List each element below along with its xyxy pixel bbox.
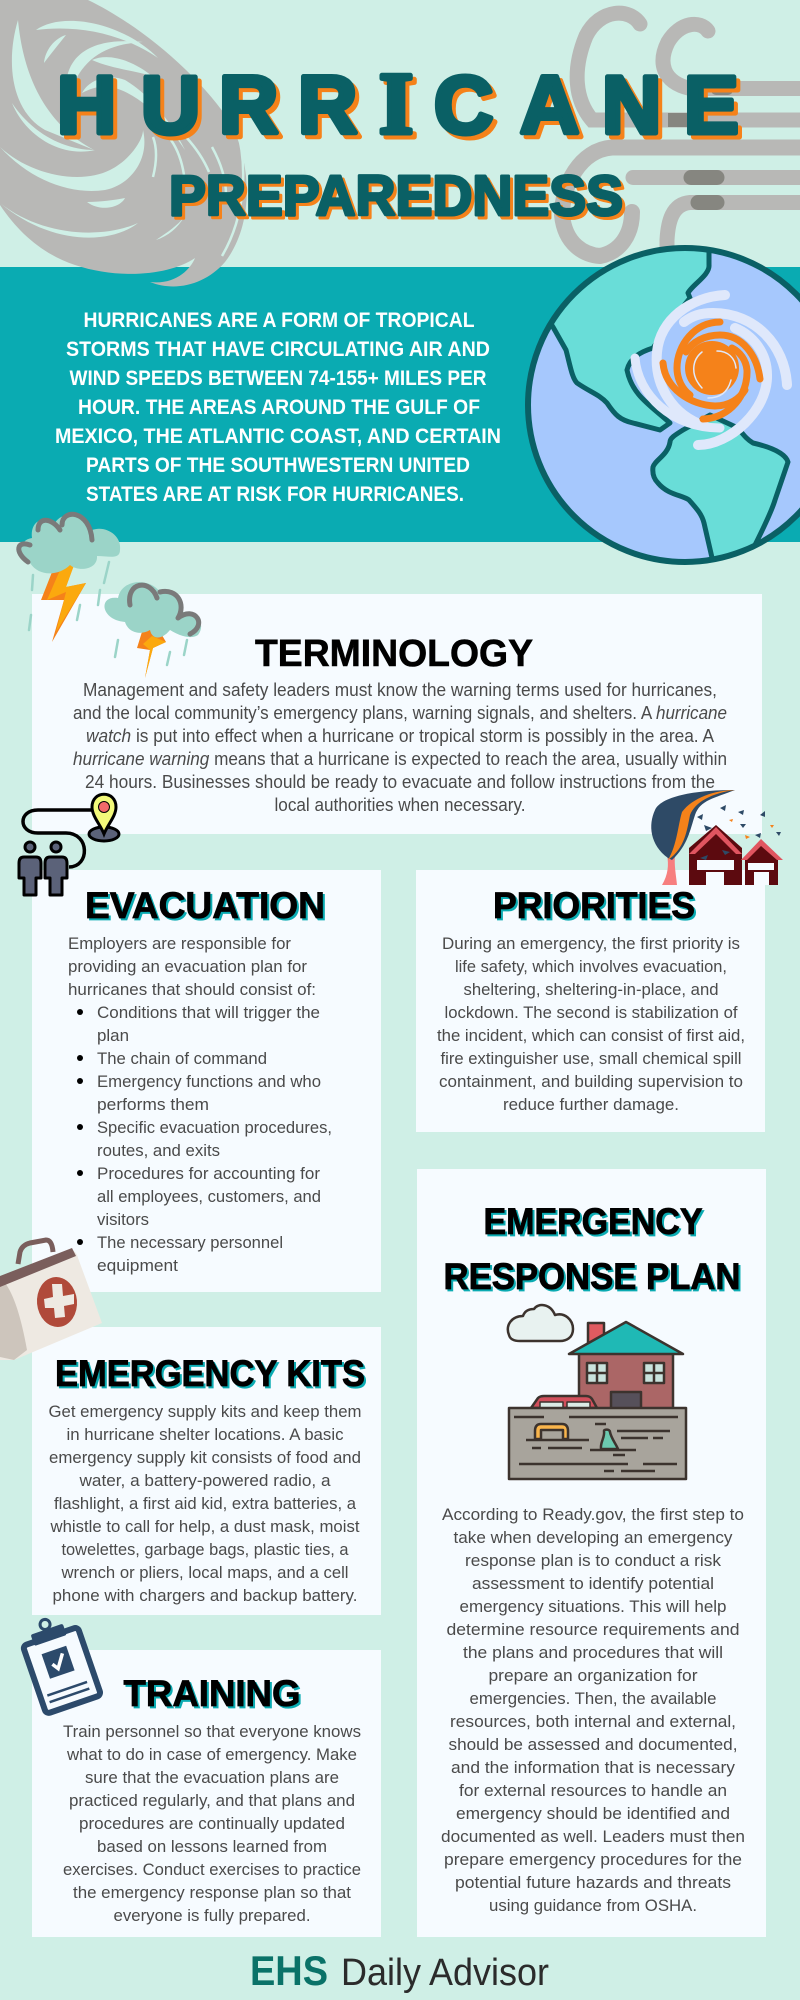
emergency kits text: phone with chargers and backup battery. (52, 1586, 358, 1605)
title: HURRICANE: R (298, 60, 357, 151)
evacuation bullet list: The necessary personnel (97, 1233, 283, 1252)
priorities text: life safety, which involves evacuation, (455, 957, 727, 976)
evacuation bullet list: The chain of command (97, 1049, 267, 1068)
intro text: STATES ARE AT RISK FOR HURRICANES. (86, 483, 464, 506)
emergency response plan text: documented as well. Leaders must then (441, 1827, 745, 1846)
heading: training: TRAINING (124, 1673, 300, 1714)
training text: sure that the evacuation plans are (85, 1768, 339, 1787)
priorities text: During an emergency, the first priority is (442, 934, 740, 953)
evacuation bullet list: Procedures for accounting for (97, 1164, 320, 1183)
icon: storm cloud right (104, 582, 201, 678)
panel: terminology (32, 594, 762, 834)
training text: based on lessons learned from (97, 1837, 327, 1856)
title: HURRICANE: R (219, 60, 278, 151)
priorities text: reduce further damage. (503, 1095, 679, 1114)
panel: emergency response plan (417, 1169, 766, 1937)
emergency kits text: water, a battery-powered radio, a (78, 1471, 331, 1490)
intro text: MEXICO, THE ATLANTIC COAST, AND CERTAIN (55, 425, 501, 448)
emergency kits text: whistle to call for help, a dust mask, moist (50, 1517, 360, 1536)
title: HURRICANE: E (684, 60, 739, 151)
priorities text: containment, and building supervision to (439, 1072, 743, 1091)
intro text: PARTS OF THE SOUTHWESTERN UNITED (86, 454, 470, 477)
terminology text: local authorities when necessary. (274, 795, 526, 815)
emergency kits text: emergency supply kit consists of food and (49, 1448, 361, 1467)
icon: evacuation route with pin and people (19, 794, 119, 895)
evacuation bullet list: performs them (97, 1095, 209, 1114)
emergency response plan text: emergency should be identified and (456, 1804, 730, 1823)
evacuation bullet list: Emergency functions and who (97, 1072, 321, 1091)
training text (63, 1722, 361, 1925)
emergency response plan text: emergencies. Then, the available (470, 1689, 716, 1708)
intro text: WIND SPEEDS BETWEEN 74-155+ MILES PER (70, 367, 486, 390)
icon: flooded house (508, 1305, 686, 1479)
priorities text: lockdown. The second is stabilization of (444, 1003, 738, 1022)
priorities text: the incident, which can consist of first aid, (437, 1026, 745, 1045)
heading: emergency response plan: EMERGENCY (484, 1201, 703, 1242)
icon: first aid bag (0, 1240, 102, 1360)
evacuation bullet list: Conditions that will trigger the (97, 1003, 320, 1022)
panel: training (32, 1650, 381, 1937)
training text: practiced regularly, and that plans and (69, 1791, 355, 1810)
evacuation bullet list: routes, and exits (97, 1141, 220, 1160)
title: HURRICANE: A (520, 60, 579, 151)
intro text (55, 309, 501, 506)
terminology text: Management and safety leaders must know the warning terms used for hurricanes, (83, 680, 717, 700)
evacuation bullet list: plan (97, 1026, 129, 1045)
terminology text: and the local community’s emergency plans, warning signals, and shelters. A hurricane (73, 703, 727, 723)
icon: wind gusts (562, 13, 800, 270)
emergency response plan text: and the information that is necessary (451, 1758, 736, 1777)
intro text: HOUR. THE AREAS AROUND THE GULF OF (78, 396, 480, 419)
emergency kits text (48, 1402, 362, 1605)
training text: exercises. Conduct exercises to practice (63, 1860, 361, 1879)
footer logo: Daily Advisor (341, 1952, 549, 1994)
evacuation intro text: Employers are responsible for (68, 934, 291, 953)
heading: emergency response plan: RESPONSE PLAN (444, 1256, 740, 1297)
heading: emergency response plan (444, 1201, 740, 1297)
emergency kits text: Get emergency supply kits and keep them (48, 1402, 362, 1421)
emergency kits text: in hurricane shelter locations. A basic (66, 1425, 344, 1444)
evacuation bullet list (77, 1003, 332, 1275)
emergency response plan text: assessment to identify potential (472, 1574, 714, 1593)
emergency response plan text: emergency situations. This will help (460, 1597, 726, 1616)
title: HURRICANE: U (141, 60, 200, 151)
emergency response plan text: response plan is to conduct a risk (465, 1551, 721, 1570)
panel: evacuation (32, 870, 381, 1292)
teal intro band (0, 267, 800, 542)
terminology text: hurricane warning means that a hurricane is expected to reach the area, usually within (73, 749, 727, 769)
hurricane spiral (635, 295, 787, 445)
emergency response plan text: potential future hazards and threats (455, 1873, 731, 1892)
terminology text (73, 680, 727, 815)
evacuation intro text: hurricanes that should consist of: (68, 980, 316, 999)
title: HURRICANE: H (57, 60, 116, 151)
title: HURRICANE: C (434, 60, 493, 151)
emergency kits text: flashlight, a first aid kid, extra batteries, a (54, 1494, 357, 1513)
terminology text: watch is put into effect when a hurricane or tropical storm is possibly in the area. A (86, 726, 714, 746)
heading: priorities: PRIORITIES (493, 885, 695, 926)
title: PREPAREDNESS: PREPAREDNESS (169, 164, 623, 228)
evacuation intro text (68, 934, 316, 999)
footer logo: EHS (250, 1947, 328, 1994)
title: HURRICANE: N (602, 60, 661, 151)
icon: tornado swirl (0, 0, 247, 286)
training text: Train personnel so that everyone knows (63, 1722, 361, 1741)
emergency response plan text: take when developing an emergency (454, 1528, 733, 1547)
priorities text: sheltering, sheltering-in-place, and (464, 980, 718, 999)
evacuation intro text: providing an evacuation plan for (68, 957, 307, 976)
emergency kits text: wrench or pliers, local maps, and a cell (61, 1563, 349, 1582)
training text: what to do in case of emergency. Make (66, 1745, 357, 1764)
emergency response plan text: resources, both internal and external, (450, 1712, 736, 1731)
emergency response plan text (441, 1505, 745, 1915)
panel: priorities (416, 870, 765, 1132)
heading: evacuation: EVACUATION (85, 885, 325, 926)
evacuation bullet list: Specific evacuation procedures, (97, 1118, 332, 1137)
intro text: STORMS THAT HAVE CIRCULATING AIR AND (66, 338, 490, 361)
evacuation bullet list: visitors (97, 1210, 149, 1229)
priorities text: fire extinguisher use, small chemical spill (440, 1049, 742, 1068)
title: HURRICANE: I (379, 56, 413, 153)
priorities text (437, 934, 745, 1114)
emergency response plan text: determine resource requirements and (446, 1620, 740, 1639)
intro text: HURRICANES ARE A FORM OF TROPICAL (84, 309, 475, 332)
icon: clipboard with check (17, 1610, 101, 1714)
training text: the emergency response plan so that (73, 1883, 351, 1902)
emergency response plan text: prepare an organization for (488, 1666, 698, 1685)
heading: terminology: TERMINOLOGY (255, 633, 533, 675)
icon: tree and houses in storm (651, 790, 783, 885)
icon: globe with hurricane (500, 240, 800, 562)
emergency response plan text: should be assessed and documented, (448, 1735, 738, 1754)
panel: emergency kits (32, 1327, 381, 1615)
training text: everyone is fully prepared. (114, 1906, 310, 1925)
emergency kits text: towelettes, garbage bags, plastic ties, a (62, 1540, 349, 1559)
footer logo (250, 1947, 549, 1994)
emergency response plan text: prepare emergency procedures for the (444, 1850, 742, 1869)
evacuation bullet list: equipment (97, 1256, 178, 1275)
icon: storm cloud left (19, 514, 120, 642)
emergency response plan text: the plans and procedures that will (463, 1643, 723, 1662)
evacuation bullet list: all employees, customers, and (97, 1187, 321, 1206)
emergency response plan text: for external resources to handle an (459, 1781, 727, 1800)
training text: procedures are continually updated (79, 1814, 345, 1833)
emergency response plan text: using guidance from OSHA. (489, 1896, 697, 1915)
heading: emergency kits: EMERGENCY KITS (55, 1353, 365, 1394)
terminology text: 24 hours. Businesses should be ready to evacuate and follow instructions from the (85, 772, 715, 792)
emergency response plan text: According to Ready.gov, the first step to (442, 1505, 744, 1524)
